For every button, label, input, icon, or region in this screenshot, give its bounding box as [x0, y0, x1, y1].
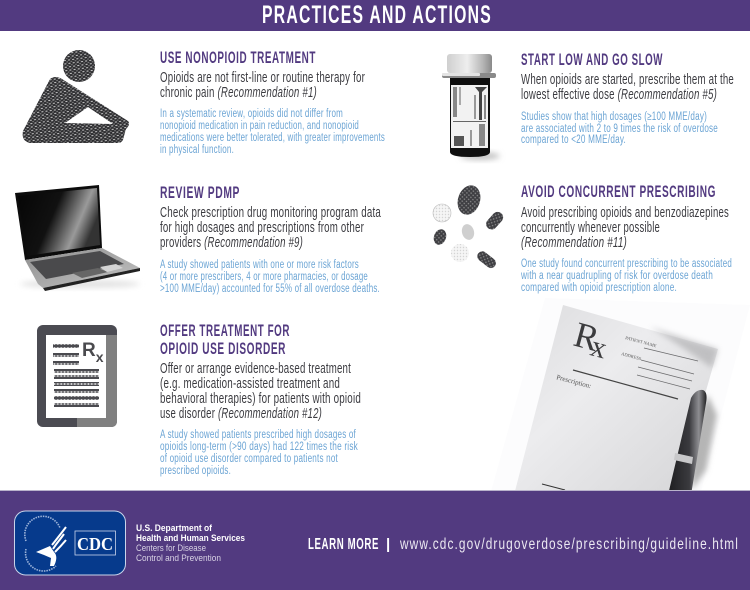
body text [160, 361, 361, 422]
department text: Health and Human Services [136, 533, 245, 543]
body text [160, 70, 365, 101]
supporting evidence: A study showed patients with one or more risk factors [160, 259, 359, 271]
panel: avoid concurrent prescribing [432, 182, 732, 294]
heading [160, 321, 290, 358]
separator: | [386, 536, 390, 553]
panel: review PDMP [15, 183, 381, 295]
title: PRACTICES AND ACTIONS [262, 1, 492, 29]
icon: laptop [15, 185, 140, 291]
supporting evidence [160, 108, 385, 156]
supporting evidence [521, 111, 718, 146]
icon: prescription tablet [37, 325, 117, 427]
supporting evidence: >100 MME/day) accounted for 55% of all overdose deaths. [160, 283, 380, 295]
Rx mark: R [570, 314, 603, 359]
supporting evidence: compared to <20 MME/day. [521, 134, 626, 146]
supporting evidence: In a systematic review, opioids did not differ from [160, 108, 343, 120]
body text [521, 205, 729, 251]
Rx mark: x [587, 330, 610, 365]
body text: (Recommendation #11) [521, 235, 627, 251]
supporting evidence: A study showed patients prescribed high dosages of [160, 429, 356, 441]
icon: pills [432, 182, 505, 270]
supporting evidence: compared with opioid prescription alone. [521, 282, 677, 294]
supporting evidence: of opioid use disorder compared to patients not [160, 453, 338, 465]
body text: for high dosages and prescriptions from other [160, 220, 364, 236]
body text [521, 72, 734, 103]
supporting evidence: medications were better tolerated, with greater improvements [160, 132, 385, 144]
Rx mark: x [96, 349, 104, 365]
body text [160, 205, 381, 251]
heading: USE NONOPIOID TREATMENT [160, 48, 316, 67]
icon: pill bottle [442, 54, 500, 160]
body text: Opioids are not first-line or routine therapy for [160, 70, 365, 86]
department text: U.S. Department of [136, 523, 213, 533]
image: prescription pad and pen [490, 298, 750, 495]
department text [136, 523, 245, 563]
body text: providers (Recommendation #9) [160, 235, 303, 251]
supporting evidence [160, 259, 380, 295]
supporting evidence: prescribed opioids. [160, 465, 231, 477]
heading: OFFER TREATMENT FOR [160, 321, 290, 340]
supporting evidence [160, 429, 358, 477]
panel: start low and go slow [442, 50, 734, 160]
department text: Control and Prevention [136, 553, 221, 563]
HHS eagle emblem [25, 516, 66, 571]
department text: Centers for Disease [136, 543, 206, 553]
body text: (e.g. medication-assisted treatment and [160, 376, 340, 392]
body text: use disorder (Recommendation #12) [160, 406, 322, 422]
body text: Check prescription drug monitoring program data [160, 205, 381, 221]
image: prescription pad and pen: Prescription: [555, 373, 592, 390]
logo: CDC [14, 511, 126, 575]
panel: use nonopioid treatment [23, 48, 385, 156]
supporting evidence [520, 258, 732, 294]
icon: person stretching [23, 50, 129, 143]
image: prescription pad and pen: PATIENT NAME [625, 335, 657, 348]
supporting evidence: in physical function. [160, 144, 234, 156]
supporting evidence: (4 or more prescribers, 4 or more pharmacies, or dosage [160, 271, 368, 283]
body text: behavioral therapies) for patients with opioid [160, 391, 361, 407]
pen [668, 390, 717, 495]
learn more: LEARN MORE [308, 536, 379, 553]
Rx mark: R [82, 340, 96, 361]
body text: chronic pain (Recommendation #1) [160, 85, 317, 101]
body text: Offer or arrange evidence-based treatment [160, 361, 351, 377]
heading: REVIEW PDMP [160, 183, 240, 202]
panel: offer treatment [37, 321, 361, 477]
supporting evidence: opioids long-term (>90 days) had 122 times the risk [160, 441, 358, 453]
footer bar [0, 490, 750, 590]
image: prescription pad and pen: ADDRESS [621, 351, 642, 361]
heading: OPIOID USE DISORDER [160, 339, 286, 358]
header bar [0, 0, 750, 31]
body text: concurrently whenever possible [521, 220, 660, 236]
CDC wordmark: CDC [77, 534, 113, 554]
supporting evidence: nonopioid medication in pain reduction, and nonopioid [160, 120, 359, 132]
